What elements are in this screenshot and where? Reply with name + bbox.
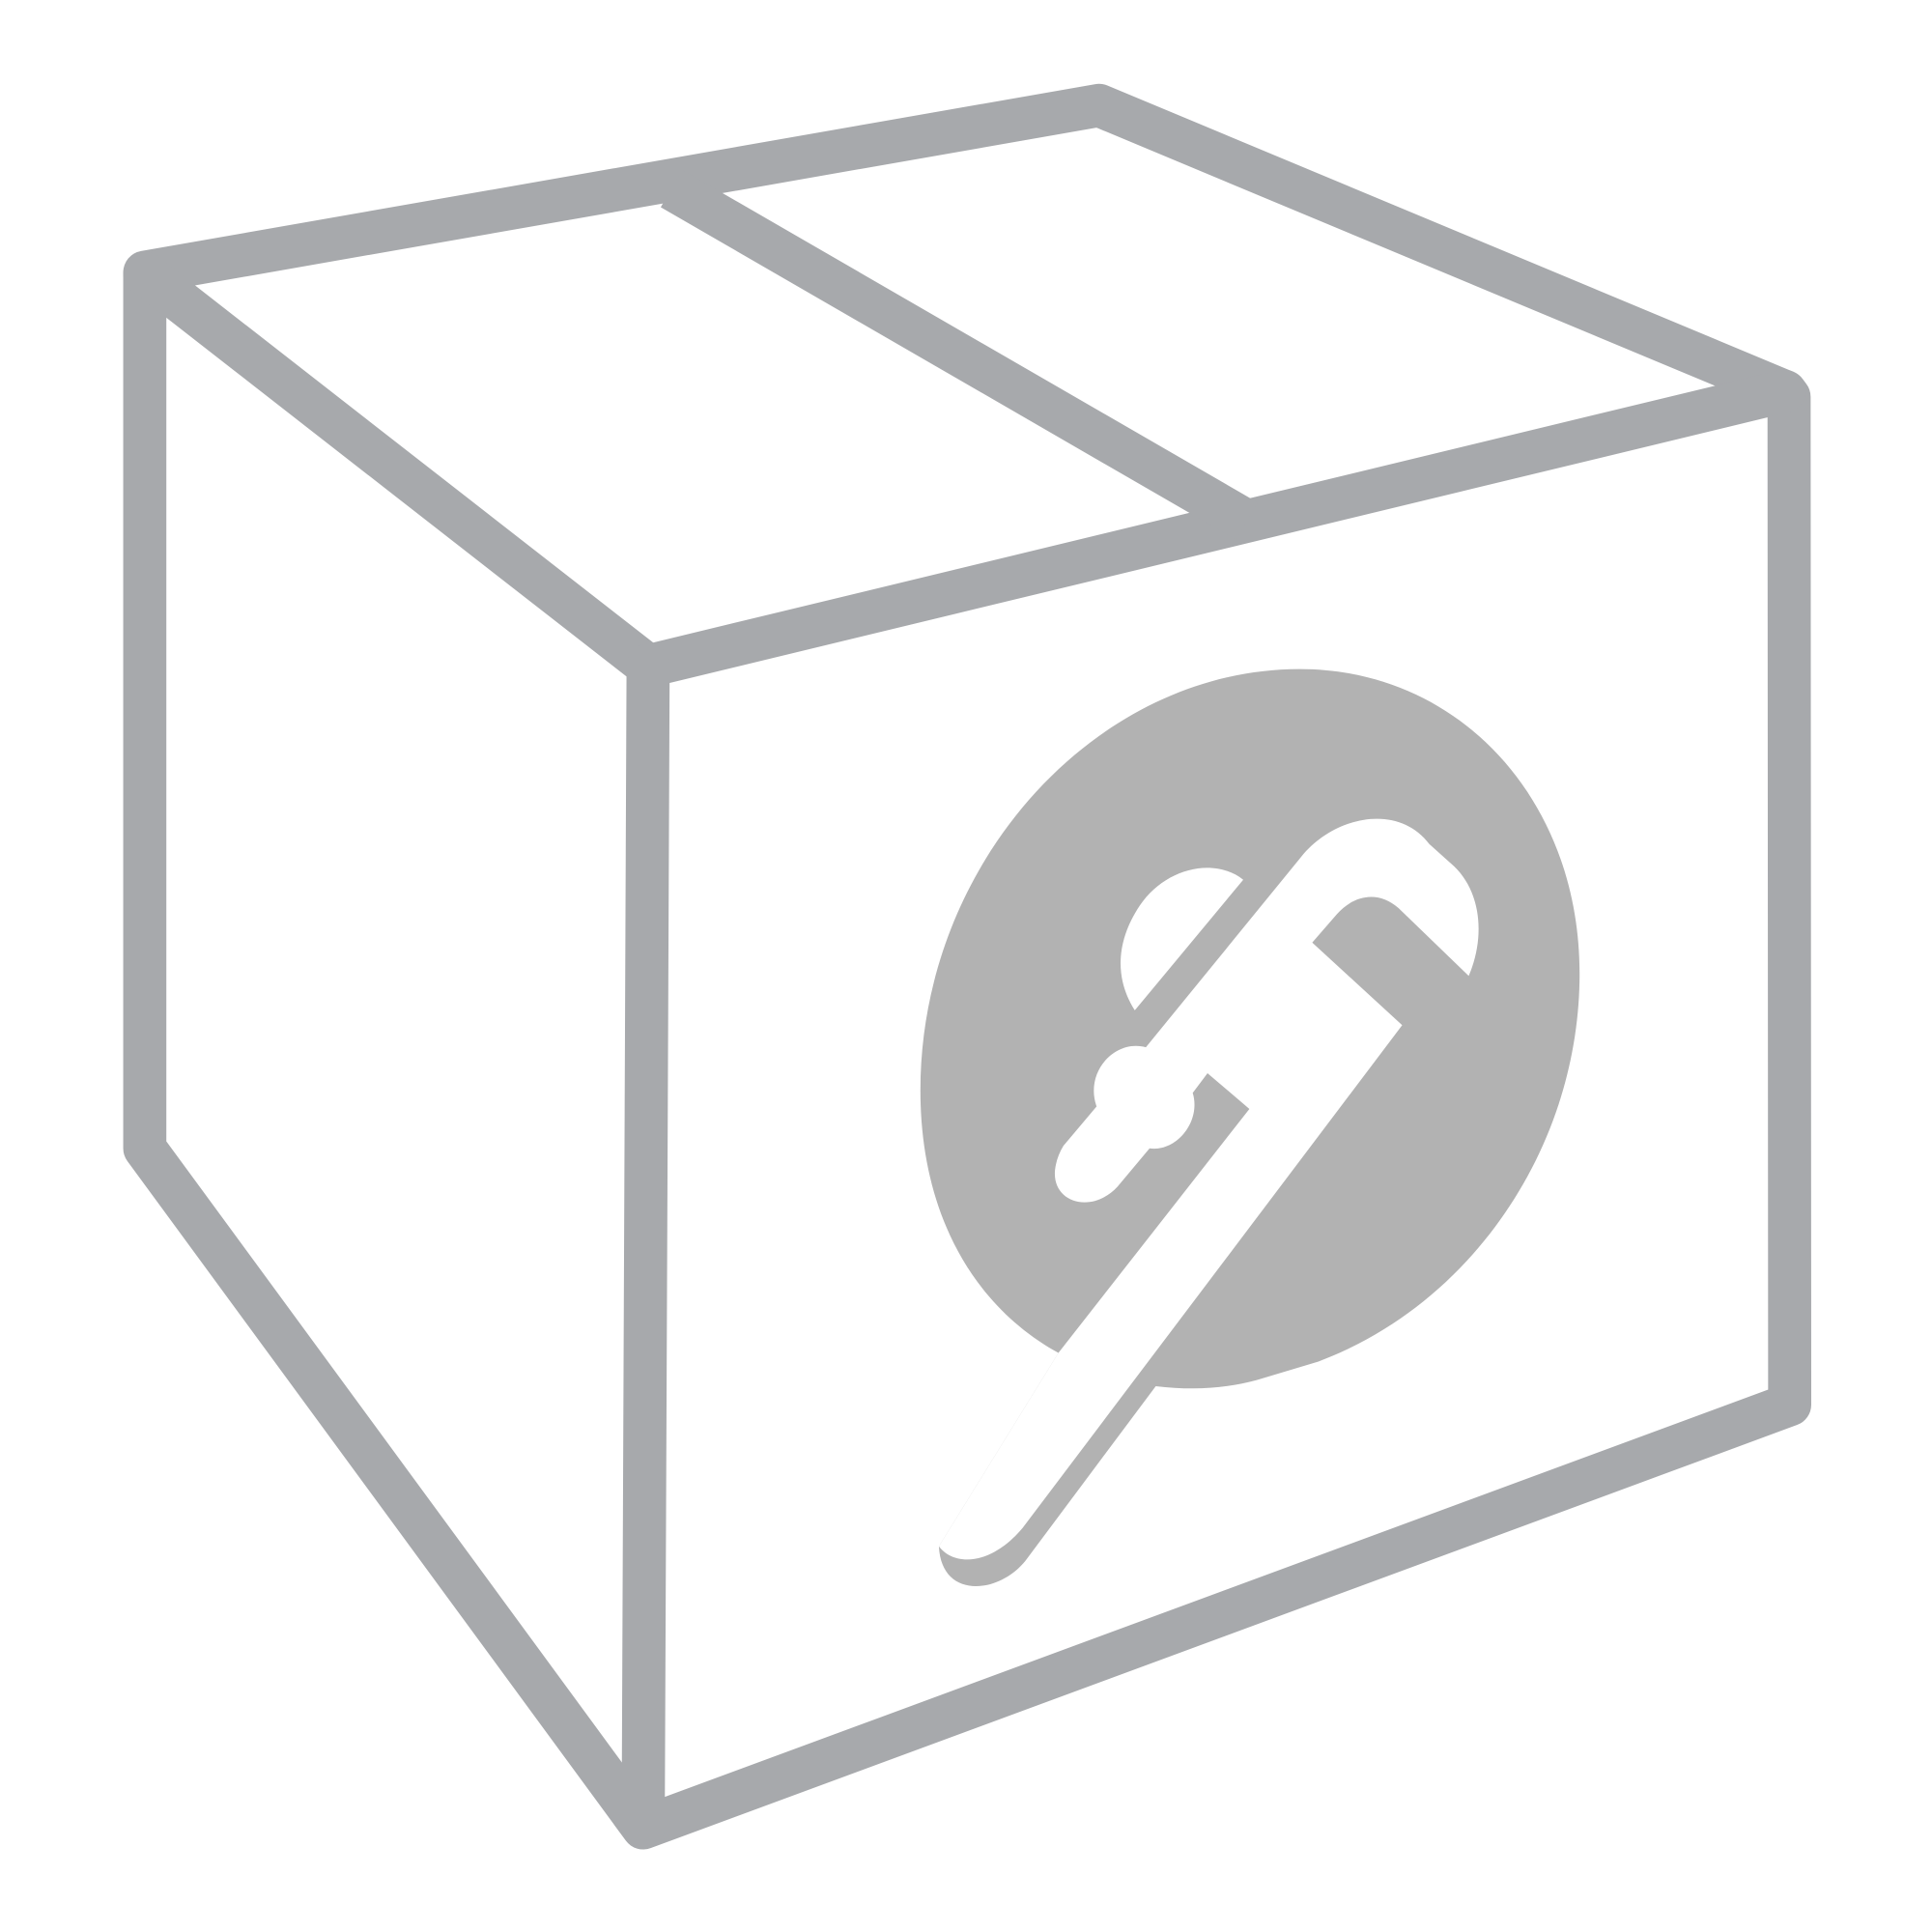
badge disc with handle shadow <box>921 669 1579 1586</box>
wrench jaw cut-out <box>1121 867 1243 1010</box>
icon: cardboard box outline <box>145 105 1790 1828</box>
wrench silhouette <box>939 819 1479 1559</box>
icon: pipe wrench badge <box>921 669 1579 1586</box>
